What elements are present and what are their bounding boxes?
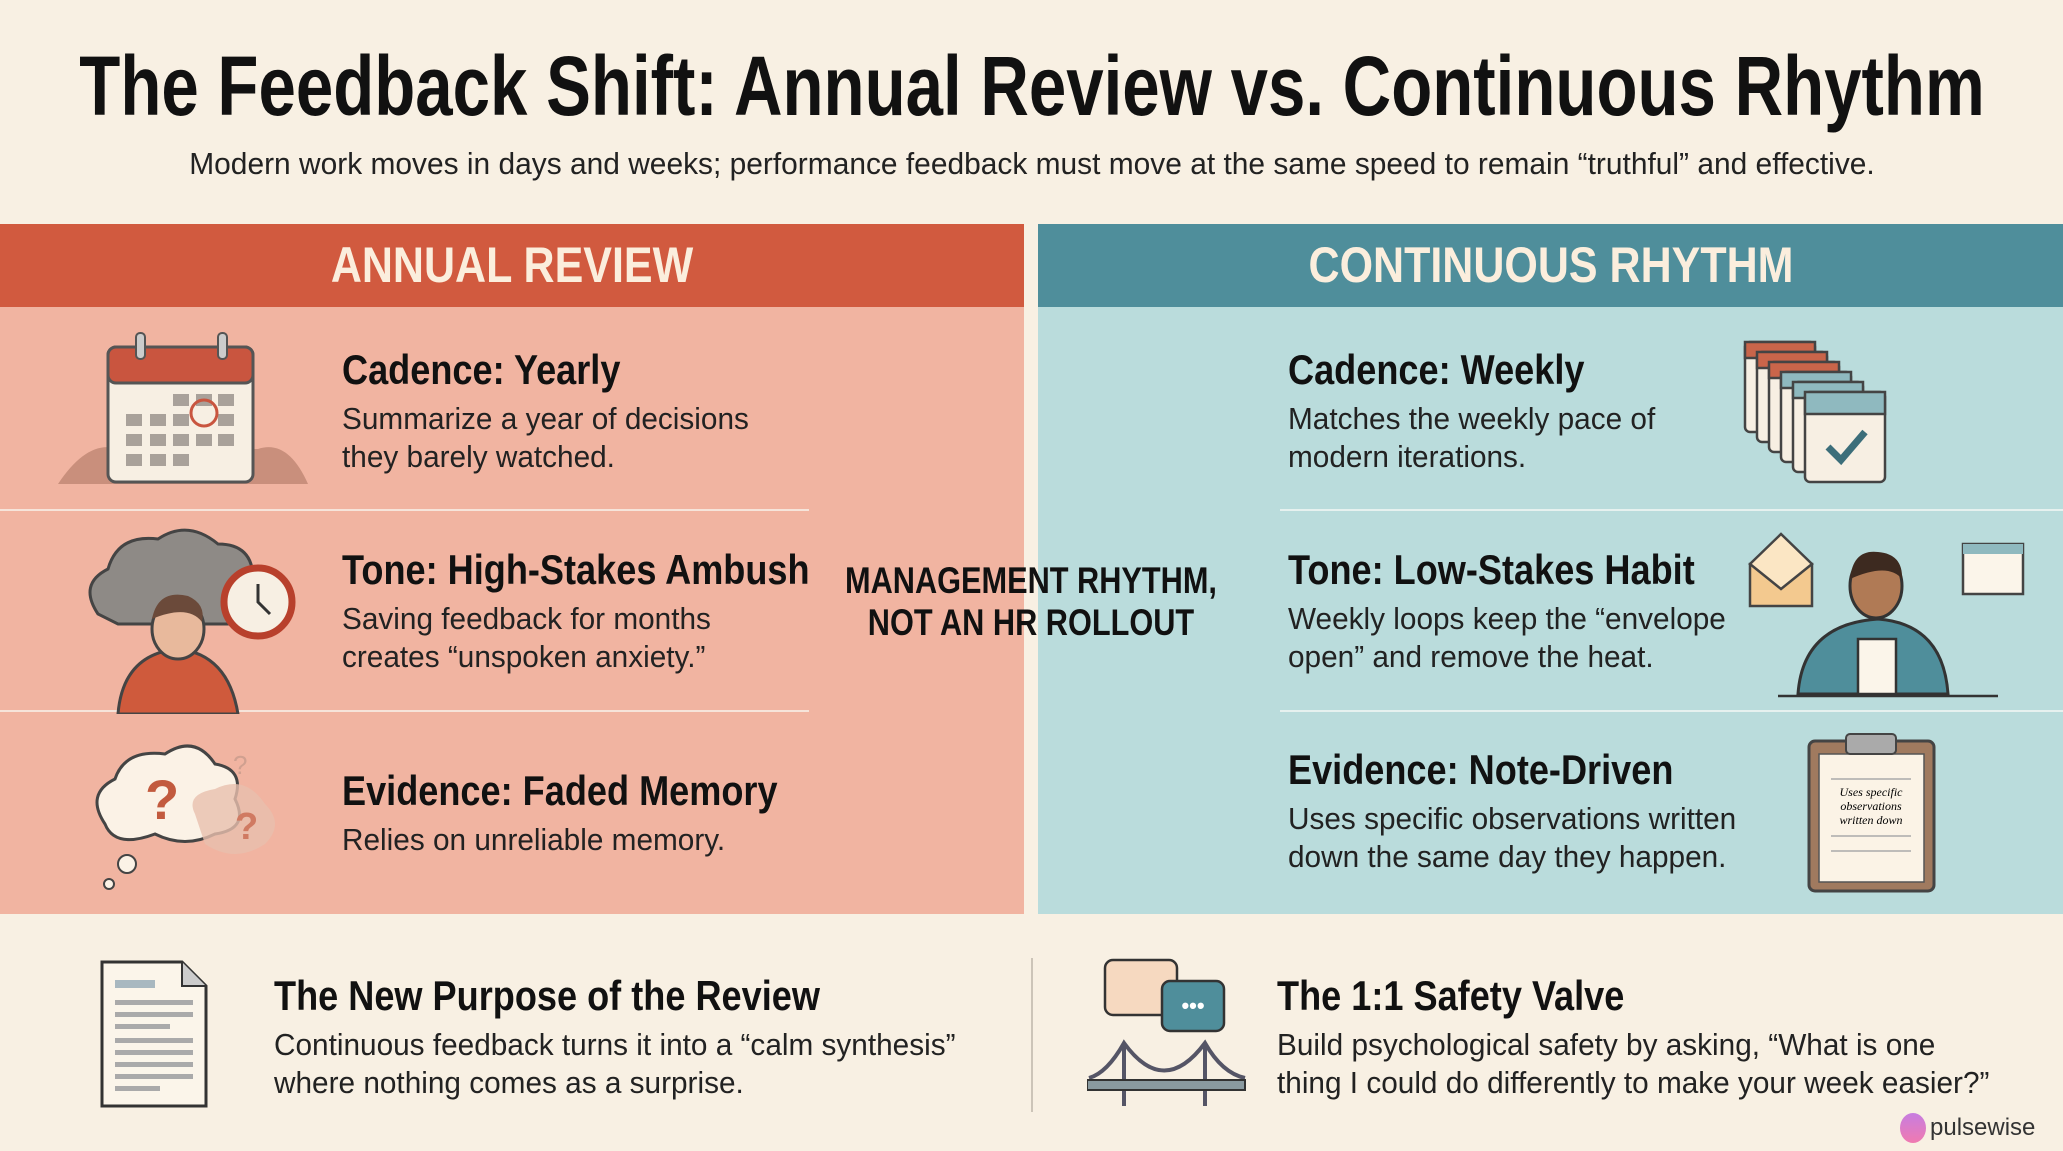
icon: chat and bridge: ••• xyxy=(1181,993,1205,1018)
icon: clipboard xyxy=(1808,733,1936,892)
icon: clipboard: Uses specific xyxy=(1840,785,1903,799)
icon: clipboard: written down xyxy=(1839,813,1903,827)
row 3 text: Relies on unreliable memory. xyxy=(342,822,725,857)
row 2 text: creates “unspoken anxiety.” xyxy=(342,639,705,674)
row 3 text xyxy=(1288,746,1736,874)
bottom left text xyxy=(274,972,956,1100)
row 3 text: Evidence: Faded Memory xyxy=(342,767,778,814)
row 2 text xyxy=(342,546,810,674)
row 3 text: Uses specific observations written xyxy=(1288,801,1736,836)
icon: person with notepad xyxy=(1748,532,2024,698)
row 2 text: Tone: Low-Stakes Habit xyxy=(1288,546,1695,593)
row 1 text: modern iterations. xyxy=(1288,439,1526,474)
subtitle: Modern work moves in days and weeks; performance feedback must move at the same speed to remain “truthful” and effective. xyxy=(189,146,1874,181)
icon: thought cloud questions: ? xyxy=(235,806,258,848)
icon: document xyxy=(100,960,208,1108)
center callout: MANAGEMENT RHYTHM, xyxy=(845,560,1217,601)
icon: calendar xyxy=(58,332,308,484)
icon: anxious person xyxy=(88,528,296,714)
row 2 text xyxy=(1288,546,1726,674)
row 1 text xyxy=(342,346,749,474)
row 1 text: Matches the weekly pace of xyxy=(1288,401,1655,436)
row 1 text: Cadence: Yearly xyxy=(342,346,620,393)
header: continuous rhythm: CONTINUOUS RHYTHM xyxy=(1308,237,1793,293)
icon: stacked calendars xyxy=(1744,340,1886,484)
bottom right text xyxy=(1277,972,1989,1100)
row 3 text: down the same day they happen. xyxy=(1288,839,1726,874)
center callout xyxy=(845,560,1217,643)
title: The Feedback Shift: Annual Review vs. Continuous Rhythm xyxy=(79,39,1984,133)
center callout: NOT AN HR ROLLOUT xyxy=(868,602,1194,643)
icon: thought cloud questions: ? xyxy=(145,768,179,831)
row 2 text: Weekly loops keep the “envelope xyxy=(1288,601,1726,636)
row 3 text xyxy=(342,767,778,857)
icon: clipboard: observations xyxy=(1840,799,1902,813)
row 1 text: Summarize a year of decisions xyxy=(342,401,749,436)
logo: pulsewise: pulsewise xyxy=(1930,1114,2035,1141)
bottom right text: thing I could do differently to make your week easier?” xyxy=(1277,1065,1989,1100)
icon: thought cloud questions: ? xyxy=(233,750,247,780)
bottom left text: Continuous feedback turns it into a “calm synthesis” xyxy=(274,1027,956,1062)
row 2 text: open” and remove the heat. xyxy=(1288,639,1654,674)
row 1 text: Cadence: Weekly xyxy=(1288,346,1584,393)
header: continuous rhythm xyxy=(1038,224,2063,307)
icon: thought cloud questions xyxy=(96,744,275,890)
panel: continuous rhythm xyxy=(1038,224,2063,914)
bottom left text: where nothing comes as a surprise. xyxy=(274,1065,744,1100)
panel: annual review xyxy=(0,224,1024,914)
bottom right text: The 1:1 Safety Valve xyxy=(1277,972,1624,1019)
bottom left text: The New Purpose of the Review xyxy=(274,972,820,1019)
bottom right text: Build psychological safety by asking, “What is one xyxy=(1277,1027,1935,1062)
header: annual review: ANNUAL REVIEW xyxy=(331,237,693,293)
row 2 text: Saving feedback for months xyxy=(342,601,711,636)
row 1 text xyxy=(1288,346,1656,474)
row 3 text: Evidence: Note-Driven xyxy=(1288,746,1673,793)
header: annual review xyxy=(0,224,1024,307)
row 2 text: Tone: High-Stakes Ambush xyxy=(342,546,810,593)
icon: chat and bridge xyxy=(1087,958,1246,1106)
row 1 text: they barely watched. xyxy=(342,439,615,474)
